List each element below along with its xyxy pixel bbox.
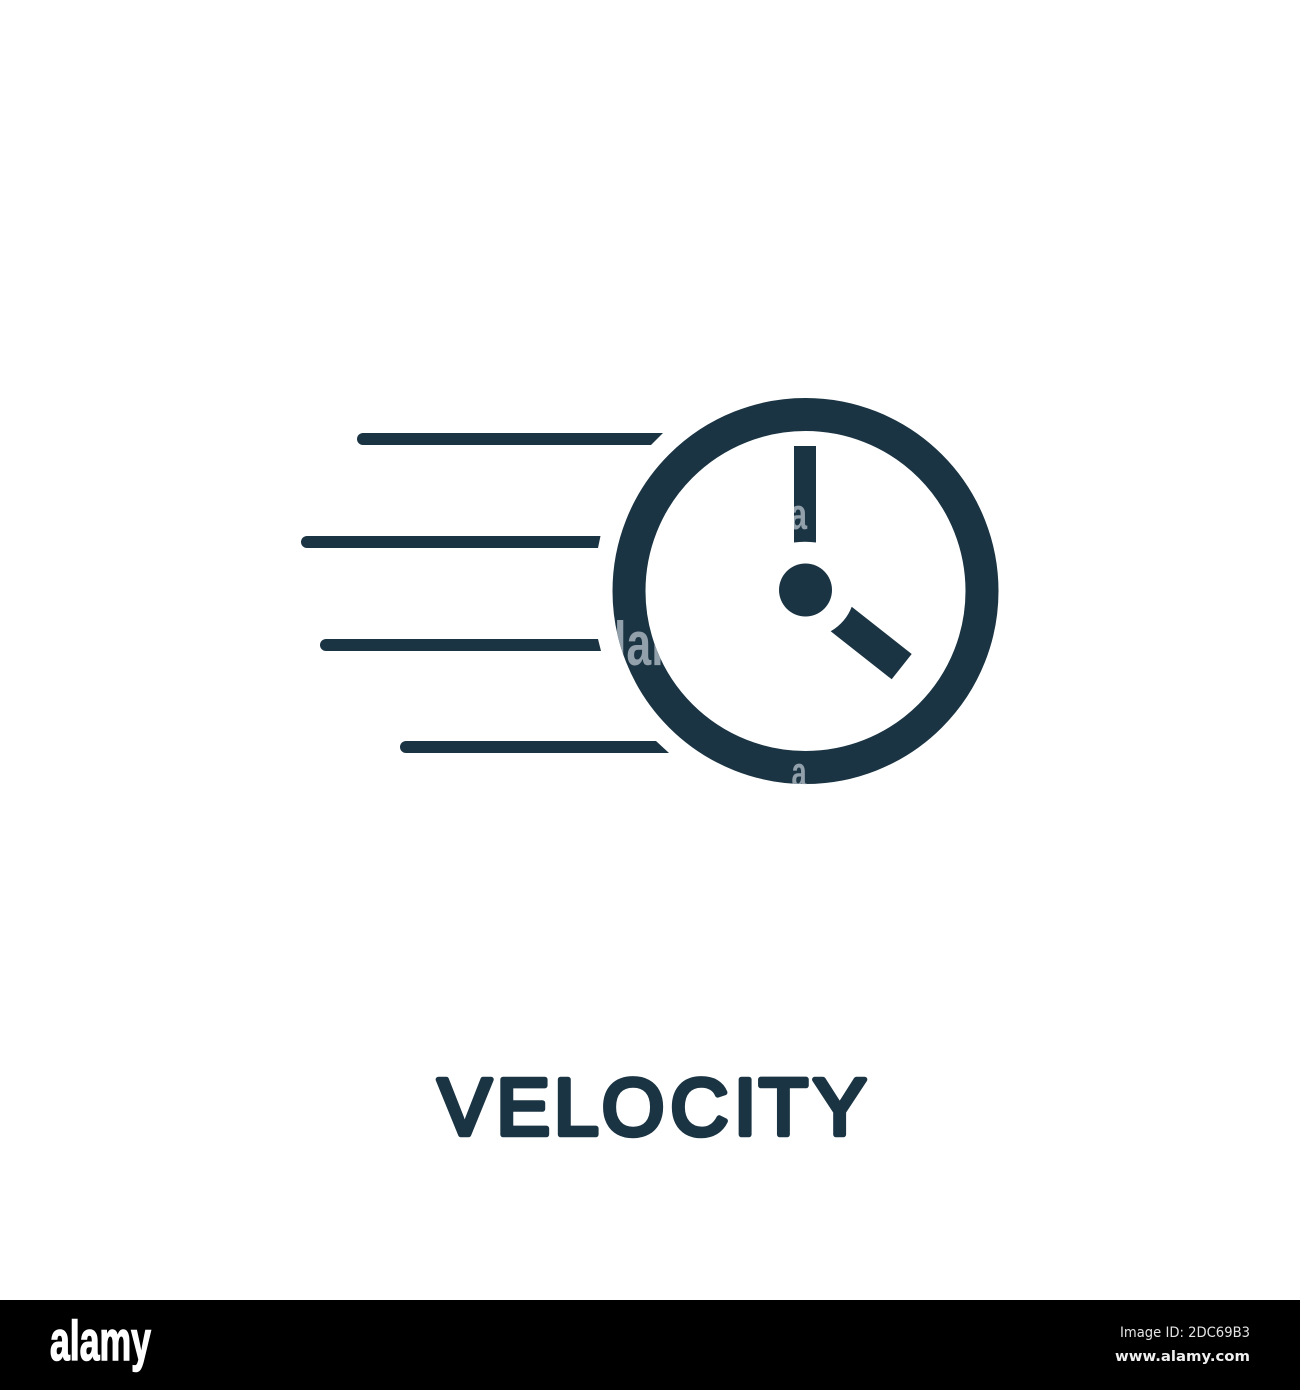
clock minute hand bbox=[794, 446, 816, 542]
speed line 3 bbox=[320, 639, 601, 651]
watermark letter on minute hand: a bbox=[790, 490, 808, 539]
watermark letter on ring bottom: a bbox=[792, 747, 807, 797]
clock hour hand bbox=[831, 607, 912, 679]
speed line 4 bbox=[400, 741, 669, 753]
speed line 2 bbox=[301, 536, 600, 548]
icon: velocity clock with speed lines bbox=[301, 414, 982, 768]
watermark letters on ring: lal bbox=[614, 610, 664, 679]
clock hub bbox=[779, 564, 832, 616]
title: VELOCITY bbox=[438, 1062, 866, 1152]
watermark fragments bbox=[617, 506, 808, 784]
speed line 1 bbox=[357, 433, 663, 445]
footer bar bbox=[0, 1300, 1300, 1390]
velocity infographic canvas bbox=[0, 398, 1300, 1390]
image id: Image ID: 2DC69B3 bbox=[1120, 1325, 1250, 1341]
alamy logo: alamy bbox=[50, 1309, 151, 1372]
website: www.alamy.com bbox=[1115, 1349, 1250, 1365]
clock ring bbox=[629, 414, 982, 768]
